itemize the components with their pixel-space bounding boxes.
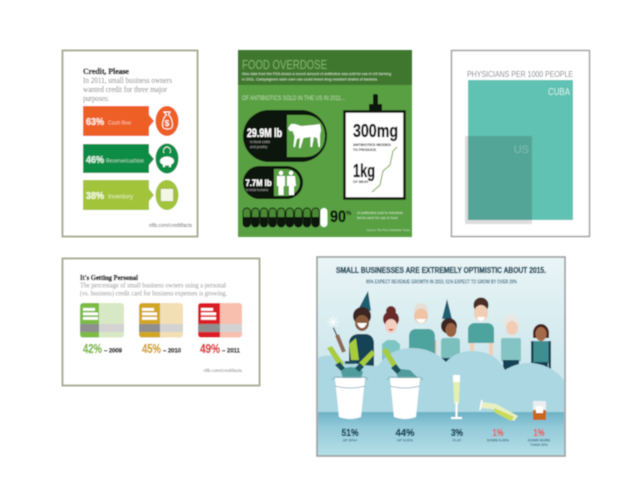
pill: cattle: 29.9M lb [247, 128, 282, 140]
heading: SMALL BUSINESSES ARE EXTREMELY OPTIMISTIC ABOUT 2015. [336, 266, 546, 275]
card: 2009: 42% [83, 341, 102, 356]
pill: humans [243, 166, 303, 199]
bar: cash flow [83, 106, 154, 136]
text block: intro [83, 76, 172, 103]
pill: humans: to treat humans [246, 188, 269, 192]
bar: cash flow: Cash flow [108, 120, 131, 126]
bar: reserve/cushion [83, 144, 154, 173]
card: 2010: – 2010 [163, 348, 182, 354]
bar: inventory: Inventory [108, 194, 134, 200]
text block: intro: New data from the FDA shows a record amount of antibiotics was sold for use in US farming [242, 72, 391, 76]
pill: cattle: and poultry [250, 145, 268, 149]
stat: 51% [342, 427, 359, 442]
text block: intro: (vs. business) credit card for business expenses is growing. [80, 290, 227, 298]
person 3 [409, 303, 436, 356]
text block: intro [80, 282, 227, 298]
text block: intro: The percentage of small business owners using a personal [80, 282, 226, 290]
stat: 1% down more than 20%: DOWN MORE [528, 438, 551, 442]
text block: intro: wanted credit for three major [83, 85, 167, 94]
stat: 1% down 5-20%: DOWN 5-20% [487, 438, 510, 442]
panel: credit please [62, 50, 198, 236]
source link: nfib.com/creditfacts [149, 223, 192, 229]
stat: 1% down more than 20%: 1% [534, 427, 545, 439]
stat: 1% down 5-20% [487, 427, 510, 442]
stat: 3%: 3% [451, 427, 464, 439]
icon: money bag: $ [165, 119, 170, 128]
pills row: 90 percent: % [346, 211, 352, 217]
bucket right with bottles [382, 348, 423, 419]
card: 2011: 49% [200, 341, 220, 356]
person 6 [501, 314, 521, 371]
heading: food overdose: FOOD OVERDOSE [242, 58, 327, 72]
card: 2011: – 2011 [222, 348, 241, 354]
bar: inventory: 38% [86, 190, 105, 202]
stat: 3%: FLAT [453, 438, 462, 442]
stat: 3% [451, 427, 464, 442]
clipboard: ANTIBIOTICS NEEDED [353, 143, 391, 147]
person 1 with party hat [349, 291, 374, 368]
text block: intro: In 2011, small business owners [83, 76, 172, 85]
rectangle: us: US [514, 144, 529, 156]
rectangle: cuba: CUBA [548, 87, 570, 98]
icon: boxes [156, 180, 178, 210]
rectangle: us [465, 136, 532, 224]
panel: physicians per 1000 people [452, 50, 590, 236]
pills row: 90 percent: Source: The Pew Charitable Trusts [367, 228, 411, 232]
person 5 [468, 298, 494, 358]
heading: credit please: Credit, Please [83, 66, 129, 76]
clipboard: 300mg [353, 121, 398, 141]
clouds [318, 348, 564, 415]
panel: food overdose [238, 50, 412, 237]
pills row: 90 percent [243, 208, 411, 232]
card: 2009: – 2009 [104, 348, 123, 354]
bar: cash flow: 63% [86, 116, 105, 128]
heading: It's Getting Personal [80, 275, 138, 282]
icon: money bag [156, 106, 178, 136]
clipboard: TO PRODUCE [353, 148, 377, 152]
card: 2010: 45% [142, 341, 161, 356]
pills row: 90 percent: farms were for use in food [357, 216, 398, 220]
bar: inventory [83, 180, 154, 210]
rectangle: cuba [468, 80, 573, 220]
bucket left with bottles [327, 338, 375, 419]
pills row: 90 percent: of antibiotics sold to industrial [357, 211, 403, 215]
stat: 51%: UP 20%+ [343, 438, 357, 442]
stat: 44%: 44% [396, 427, 415, 439]
text block: intro [242, 72, 391, 82]
line: growth [372, 147, 397, 192]
bar: reserve/cushion: 46% [86, 154, 105, 166]
icon: whiskey glass [533, 401, 546, 420]
card: 2009 [80, 303, 124, 356]
icon: people [277, 171, 296, 195]
person 4 with party hat [441, 299, 460, 370]
text block: intro: purposes: [83, 94, 109, 103]
sparkler [327, 316, 344, 352]
text block: intro: in 2011. Campaigners warn over use could breed drug resistant strains of bacteria. [242, 78, 378, 82]
icon: cow [288, 124, 321, 148]
table [318, 412, 564, 455]
panel: it's getting personal [62, 258, 260, 386]
pill: humans: 7.7M lb [246, 178, 272, 189]
source link: nfib.com/creditfacts [203, 368, 243, 373]
clipboard [344, 94, 404, 198]
icon: tipped glass [480, 400, 518, 421]
pills row: 90 percent: 90 [330, 208, 346, 226]
stat: 1% down 5-20%: 1% [492, 427, 504, 439]
panel: small businesses optimistic [317, 257, 565, 456]
bar: reserve/cushion: Reserve/cushion [106, 158, 144, 164]
person 2 [382, 306, 400, 362]
pill: cattle: to treat cattle [250, 140, 270, 144]
card: 2011 [198, 303, 242, 356]
person 7 [531, 324, 551, 376]
icon: piggy bank [156, 144, 178, 174]
subheading: 95% EXPECT REVENUE GROWTH IN 2015; 51% EXPECT TO GROW BY OVER 20% [366, 280, 517, 286]
stat: 51%: 51% [342, 427, 359, 439]
pill: cattle [243, 110, 327, 162]
card: 2010 [139, 303, 183, 356]
heading: PHYSICIANS PER 1000 PEOPLE [467, 69, 573, 79]
icon: champagne flute [451, 375, 462, 419]
stat: 44%: UP 5-20% [397, 438, 414, 442]
stat: 1% down more than 20%: THAN 20% [530, 443, 549, 447]
illustration: people [327, 291, 551, 376]
subheading: OF ANTIBIOTICS SOLD IN THE US IN 2011... [242, 96, 345, 102]
stat: 1% down more than 20% [528, 427, 551, 447]
clipboard: OF MEAT [353, 180, 369, 184]
clipboard: 1kg [353, 161, 375, 181]
